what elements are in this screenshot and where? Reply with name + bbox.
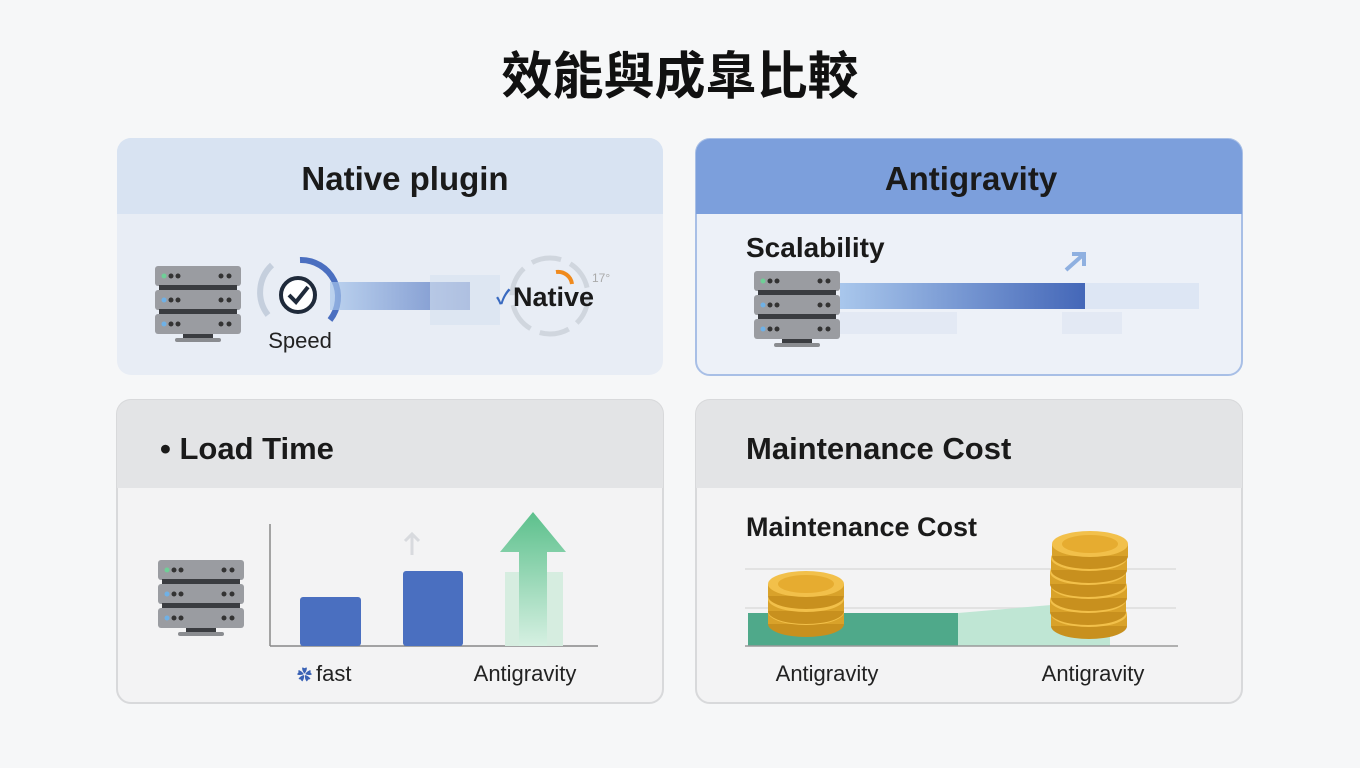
label: speed: Speed bbox=[268, 328, 332, 353]
chart: cost: Antigravity bbox=[1042, 661, 1144, 686]
panel: maintenance cost bbox=[696, 400, 1242, 703]
icon: tall coin stack bbox=[1050, 531, 1128, 639]
heading: maintenance cost: Maintenance Cost bbox=[746, 431, 1011, 466]
label: native: 17° bbox=[592, 271, 610, 285]
heading: native plugin: Native plugin bbox=[301, 160, 509, 197]
icon: server bbox=[158, 560, 244, 636]
heading: antigravity: Antigravity bbox=[885, 160, 1058, 197]
chart: load time: Antigravity bbox=[474, 661, 576, 686]
chart: load time bbox=[270, 512, 598, 686]
panel: antigravity bbox=[696, 139, 1242, 375]
subheading: Maintenance Cost bbox=[746, 512, 977, 542]
label: native: ✓ bbox=[496, 287, 511, 309]
icon: speed gauge bbox=[260, 260, 338, 320]
panel: load time bbox=[117, 400, 663, 703]
label: native: Native bbox=[513, 282, 594, 312]
label: native bbox=[496, 258, 610, 334]
title: 效能與成皐比較 bbox=[501, 48, 859, 105]
panel: native plugin bbox=[117, 138, 663, 375]
heading: load time: • Load Time bbox=[160, 431, 334, 466]
icon: server bbox=[754, 271, 840, 347]
bar: speed bbox=[330, 282, 470, 310]
chart: cost bbox=[745, 531, 1178, 686]
label: scalability: Scalability bbox=[746, 232, 885, 263]
bar: scalability bbox=[840, 254, 1199, 334]
chart: load time: fast bbox=[316, 661, 351, 686]
icon: server bbox=[155, 266, 241, 342]
chart: load time: ✿ bbox=[297, 667, 312, 684]
icon: small coin stack bbox=[768, 571, 844, 637]
chart: cost: Antigravity bbox=[776, 661, 878, 686]
